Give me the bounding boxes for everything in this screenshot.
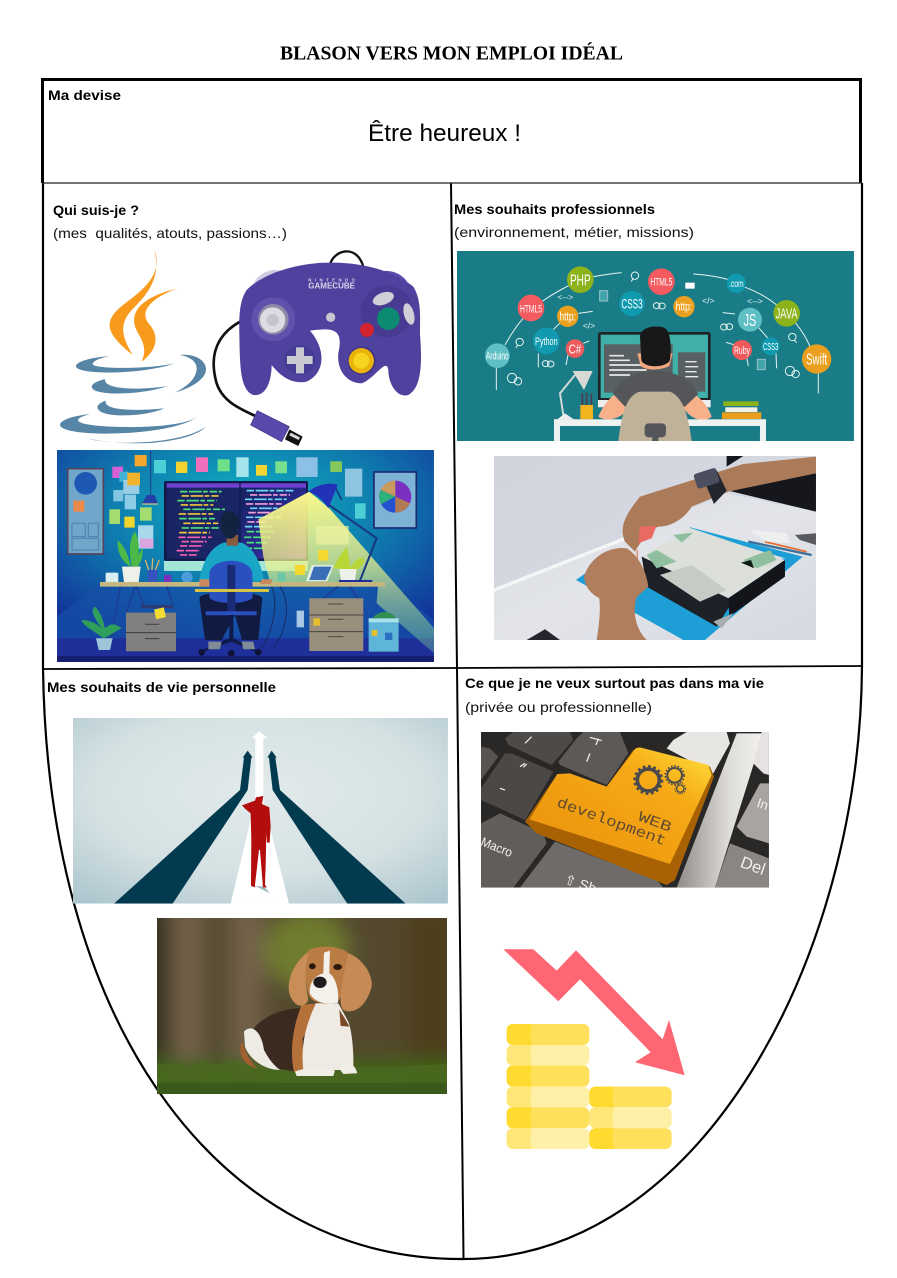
icon: falling red arrow: [503, 949, 685, 1075]
panel: souhaits professionnels: [454, 201, 854, 640]
label: nintendo brand: NINTENDO: [308, 277, 356, 282]
bubble: CSS3 center: CSS3: [621, 296, 643, 312]
books: [723, 401, 759, 406]
arm top: [623, 457, 816, 552]
title: BLASON VERS MON EMPLOI IDÉAL: [280, 42, 623, 64]
bubble: http left: [557, 306, 578, 327]
bubble: http center: [673, 296, 695, 317]
image: programmer with language bubbles: <-->: [557, 292, 573, 302]
desk lamp: [327, 503, 377, 581]
key label: development: development: [554, 796, 668, 850]
bubble: HTML5 left: HTML5: [520, 303, 542, 315]
pie chart poster: [374, 472, 416, 528]
heading: ne veux surtout pas: Ce que je ne veux surtout pas dans ma vie: [465, 675, 764, 691]
gears: [635, 766, 686, 794]
dog head: [306, 947, 349, 1004]
image: programmer with language bubbles: </>: [702, 295, 715, 305]
desk: [100, 582, 385, 587]
bubble: C sharp: [566, 339, 584, 358]
bubble: CSS3 center: [619, 291, 645, 316]
bubble: JAVA: JAVA: [776, 307, 798, 323]
image: programmer with language bubbles: </>: [583, 321, 595, 331]
image: web development key: [479, 732, 770, 896]
drawers: [126, 613, 176, 651]
image: hands repairing console: [494, 456, 816, 640]
key label: shift: ⇧ Sh: [562, 871, 598, 896]
key label: Del: Del: [738, 853, 768, 879]
subheading: environnement: (environnement, métier, missions): [454, 224, 694, 240]
bubble: http left: http:: [559, 309, 576, 323]
image: programmer with language bubbles: [457, 251, 854, 443]
key glyphs: [500, 737, 602, 790]
code lines: [177, 491, 293, 555]
keyboard keys: [481, 732, 769, 888]
key label: In: In: [755, 795, 770, 813]
bubble: http center: http:: [676, 300, 692, 314]
person: [199, 543, 264, 582]
bubble: PHP: [567, 266, 594, 293]
bubble: CSS3 right: CSS3: [763, 342, 779, 353]
heading: souhaits professionnels: Mes souhaits professionnels: [454, 201, 655, 217]
desk: [554, 419, 766, 426]
heading: qui suis-je: Qui suis-je ?: [53, 202, 139, 218]
heading: vie personnelle: Mes souhaits de vie personnelle: [47, 679, 276, 695]
image: developer desk room: [57, 450, 434, 662]
monitor: [164, 481, 308, 561]
bubble: dot com: [727, 274, 746, 293]
icon: gamecube controller: [214, 251, 421, 446]
bubble: Arduino: [485, 343, 510, 368]
heading: ma devise: Ma devise: [48, 87, 121, 103]
sticky notes: [109, 455, 366, 549]
bubble: HTML5 center: [648, 268, 675, 295]
grass blades: [157, 1059, 447, 1094]
key label: WEB: WEB: [636, 810, 674, 837]
icon: coin stacks: [507, 1024, 672, 1149]
subheading: privée ou professionnelle: (privée ou professionnelle): [465, 699, 652, 715]
bubble: C sharp: C#: [569, 342, 581, 356]
lamp beam: [258, 492, 434, 653]
tools: [748, 542, 812, 555]
side plant: [82, 607, 122, 638]
image: programmer with language bubbles: <-->: [747, 296, 763, 306]
dog body: [249, 1008, 313, 1072]
bubble: HTML5 left: [518, 295, 544, 321]
arm bottom: [584, 548, 648, 640]
panel: ce que je ne veux pas: [465, 675, 770, 1149]
bubble: HTML5 center: HTML5: [650, 277, 672, 289]
connecting arcs: [496, 273, 818, 393]
paper on wall: [316, 526, 349, 545]
image: beagle on grass: [133, 903, 467, 1113]
bubble: Ruby: Ruby: [734, 345, 750, 357]
bubble: CSS3 right: [762, 337, 780, 355]
panel: ma devise: [42, 80, 862, 183]
stack: short: [589, 1087, 672, 1149]
desk lamp: [560, 375, 575, 415]
bubble: Arduino: Arduino: [486, 351, 509, 363]
image: crossroads with red figure: [73, 718, 448, 904]
blue mat: [576, 557, 803, 640]
icon: java logo: [60, 249, 206, 443]
chair: [618, 392, 692, 441]
shield outline: [43, 183, 862, 1259]
key label: Macro: Macro: [479, 835, 514, 860]
poster left: [68, 469, 103, 554]
monitor: [598, 332, 711, 407]
subheading: qualités: (mes qualités, atouts, passions…): [53, 225, 287, 241]
bubble: dot com: .com: [729, 279, 744, 290]
motto: Être heureux !: [368, 120, 521, 147]
small glyphs: [507, 272, 799, 385]
bubble: Swift: Swift: [806, 351, 828, 368]
bubble: JS: JS: [744, 310, 756, 330]
bubble: Python: [533, 328, 560, 354]
bubble: JAVA: [773, 300, 800, 327]
console board: [642, 528, 785, 598]
bubble: Ruby: [732, 340, 752, 360]
red figure: [242, 796, 271, 887]
panel: souhaits de vie personnelle: [47, 679, 467, 1113]
bubble: Python: Python: [535, 336, 558, 348]
person: [598, 394, 712, 420]
panel: qui suis-je: [53, 202, 434, 662]
bubble: PHP: PHP: [570, 272, 591, 289]
pencil cup: [582, 393, 591, 405]
hanging lamp: [150, 450, 152, 495]
orange key: [525, 747, 714, 885]
label: gamecube brand: GAMECUBE: [308, 282, 356, 291]
desk items and plants: [117, 532, 143, 568]
stack: tall: [507, 1024, 589, 1149]
bubble: Swift: [802, 344, 831, 374]
bubble: JS: [738, 308, 762, 332]
